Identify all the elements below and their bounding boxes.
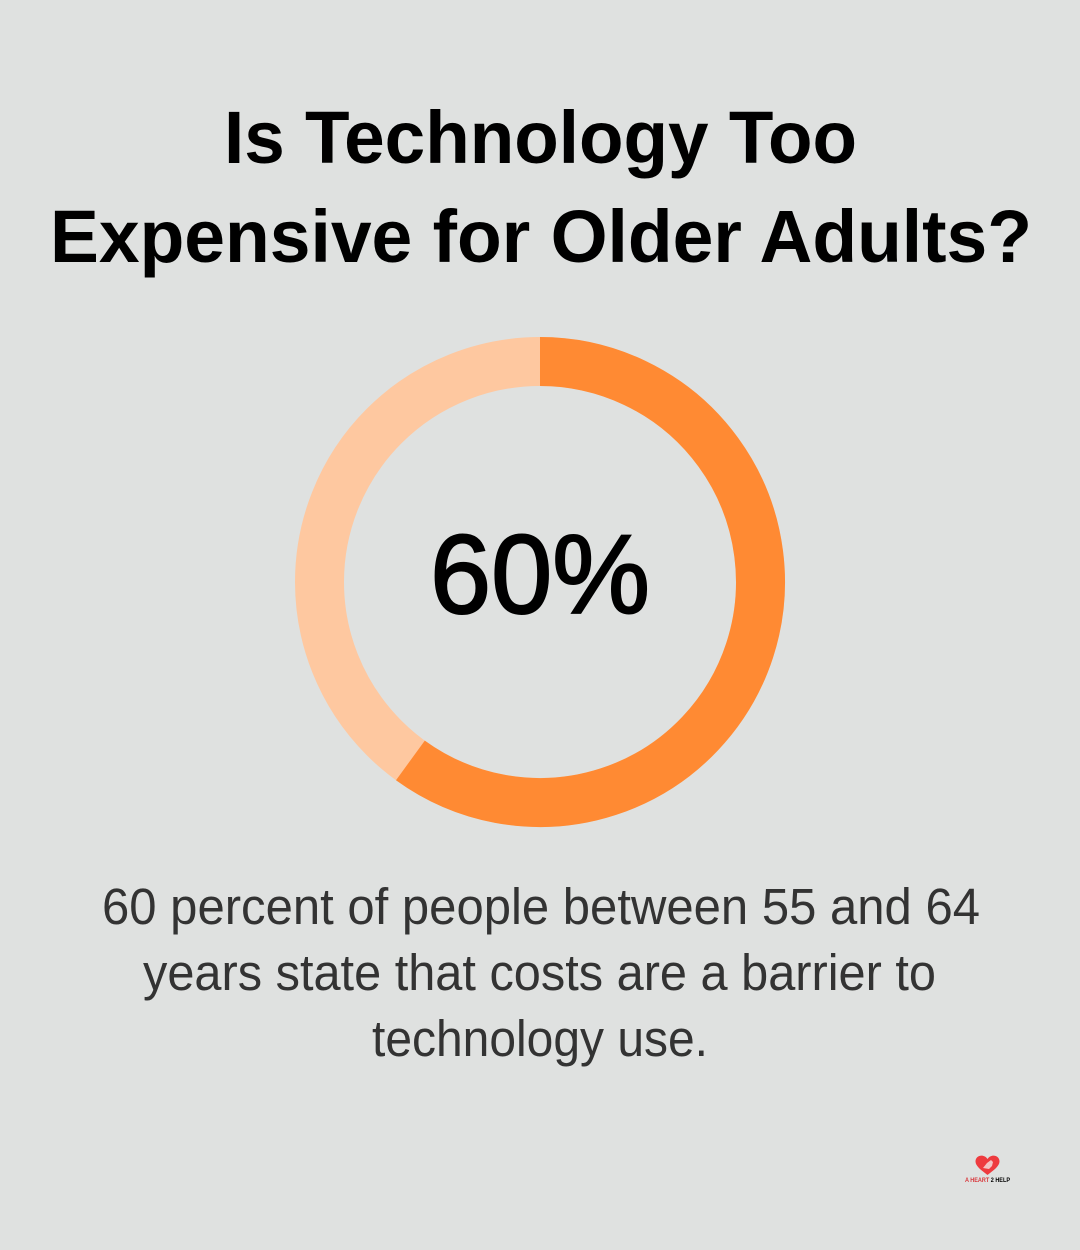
logo: A Heart 2 Help: [965, 1156, 1010, 1184]
title: [50, 96, 1032, 278]
description: technology use.: [372, 1010, 708, 1067]
title: Expensive for Older Adults?: [50, 195, 1032, 278]
title: Is Technology Too: [224, 96, 857, 179]
donut value: 60%: [430, 512, 650, 637]
description: [102, 878, 980, 1067]
icon: heart: [976, 1156, 1000, 1175]
description: years state that costs are a barrier to: [143, 944, 936, 1001]
donut chart: 60 percent: [320, 362, 760, 802]
icon: hands: [983, 1160, 993, 1169]
logo wordmark: A HEART 2 HELP: [965, 1177, 1010, 1184]
description: 60 percent of people between 55 and 64: [102, 878, 980, 935]
